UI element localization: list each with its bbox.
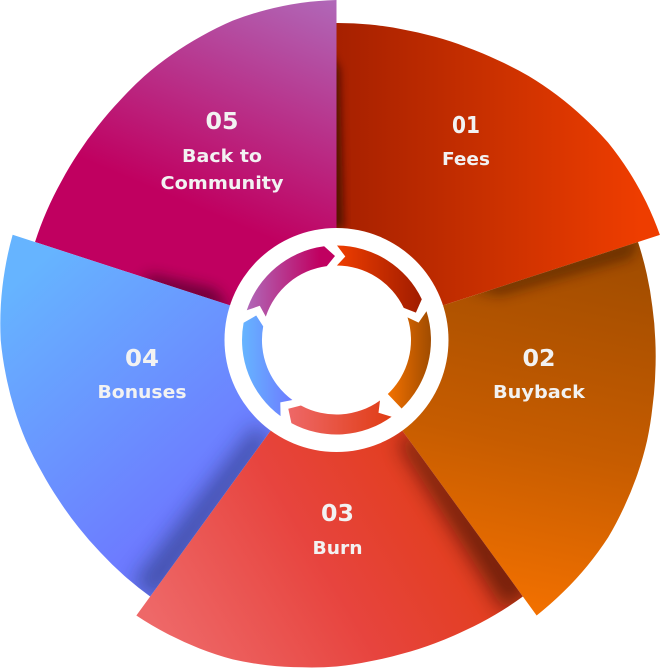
- label 03: [312, 501, 362, 559]
- central white ring: [224, 228, 448, 452]
- segment 03: burn: [136, 430, 523, 668]
- label 05: 05: [206, 109, 238, 135]
- label 04: Bonuses: [98, 382, 186, 403]
- inner arrow 01: [337, 246, 422, 313]
- label 01: 01: [452, 113, 480, 139]
- inner arrow 05: [247, 246, 335, 317]
- label 01: [442, 113, 490, 170]
- label 02: Buyback: [493, 382, 586, 403]
- segment 04: bonuses: [0, 234, 271, 596]
- label 03: 03: [321, 501, 354, 527]
- label 01: Fees: [442, 149, 490, 170]
- label 02: 02: [522, 346, 556, 372]
- segment 05: back to community: [35, 0, 336, 306]
- inner arrow 02: [388, 311, 431, 408]
- label 02: [493, 346, 586, 403]
- label 05: Community: [160, 173, 284, 194]
- segment 02: buyback: [402, 242, 656, 616]
- label 05: Back to: [182, 146, 262, 167]
- inner arrow 03: [288, 400, 392, 435]
- segment 01: fees: [336, 23, 660, 306]
- label 04: [98, 346, 186, 403]
- label 04: 04: [125, 346, 159, 372]
- label 05: [160, 109, 284, 194]
- label 03: Burn: [312, 538, 362, 559]
- inner arrow 04: [242, 316, 292, 416]
